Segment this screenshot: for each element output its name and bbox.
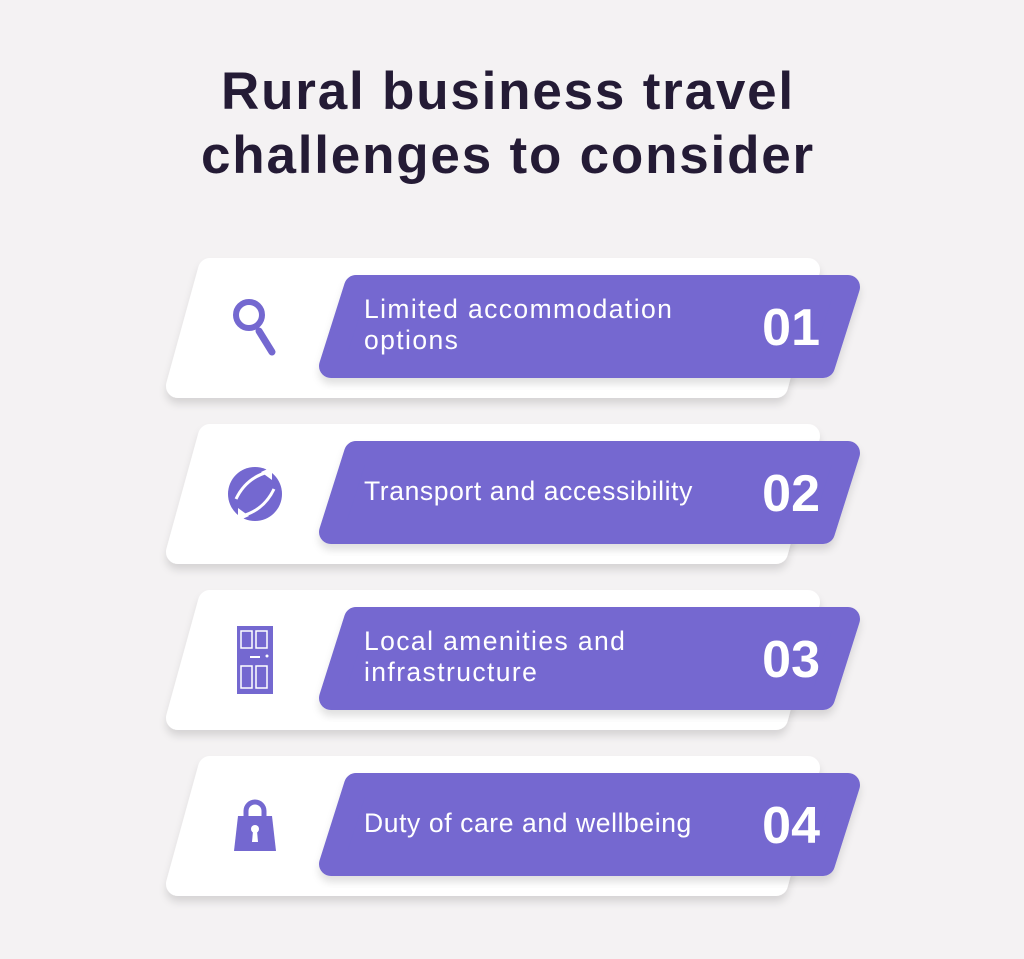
label 1: Limited accommodation <box>364 294 673 324</box>
label 2: Transport and accessibility <box>364 476 693 506</box>
number 04: 04 <box>762 797 820 855</box>
title <box>201 62 815 185</box>
row 3 <box>178 602 848 718</box>
icon: exchange arrows <box>228 467 282 521</box>
label 4: Duty of care and wellbeing <box>364 808 692 838</box>
icon: magnifier <box>236 302 272 352</box>
row 3: infrastructure <box>364 657 538 687</box>
title: Rural business travel <box>221 62 795 121</box>
title: challenges to consider <box>201 126 815 185</box>
number 01: 01 <box>762 299 820 357</box>
row 4 <box>178 768 848 884</box>
icon: padlock bag <box>234 802 276 851</box>
label 3: Local amenities and <box>364 626 626 656</box>
icon: door <box>237 626 273 694</box>
number 03: 03 <box>762 631 820 689</box>
row 1 <box>178 270 848 386</box>
number 02: 02 <box>762 465 820 523</box>
row 2 <box>178 436 848 552</box>
row 1: options <box>364 325 459 355</box>
